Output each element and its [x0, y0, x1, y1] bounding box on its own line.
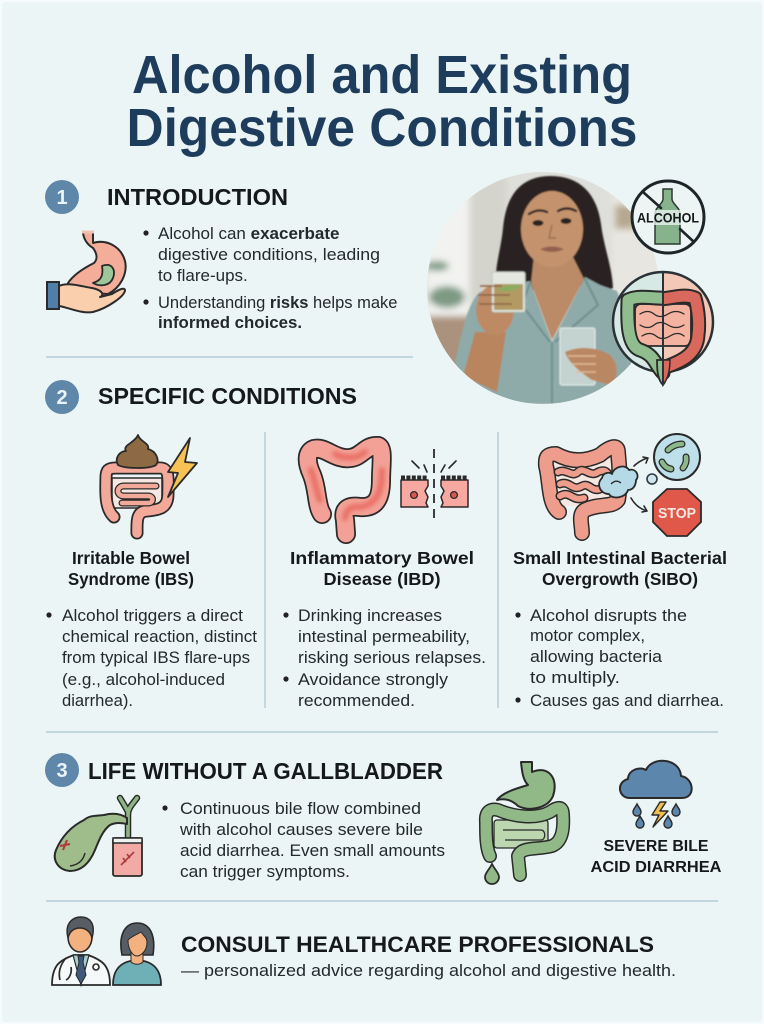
glass with juice: [492, 272, 525, 312]
heading: introduction: INTRODUCTION: [107, 184, 288, 210]
section 3: life without a gallbladder: [45, 753, 722, 884]
number badge 2: 2: [56, 387, 68, 409]
icon: inflamed colon: [308, 446, 382, 534]
icon: intestine with bacteria and stop sign: STOP: [658, 505, 696, 522]
number badge 1: [45, 180, 79, 214]
neck and chest: [531, 255, 584, 340]
label: severe bile acid diarrhea: ACID DIARRHEA: [590, 859, 722, 876]
heading: life without a gallbladder: LIFE WITHOUT A GALLBLADDER: [88, 758, 443, 784]
text block: introduction bullets: Alcohol can exacerbate: [158, 224, 339, 243]
photo: woman holding drinks: [425, 172, 662, 404]
text block: gallbladder bullet: with alcohol causes severe bile: [179, 820, 423, 839]
heading: SIBO: Overgrowth (SIBO): [542, 569, 698, 589]
text block: IBS bullets: Alcohol triggers a direct: [62, 606, 243, 625]
text block: introduction bullets: informed choices.: [158, 313, 302, 332]
heading: IBD: Inflammatory Bowel: [290, 548, 474, 568]
hair: [496, 176, 613, 292]
text block: gallbladder bullet: Continuous bile flow combined: [180, 799, 421, 818]
label: severe bile acid diarrhea: SEVERE BILE: [604, 838, 708, 855]
icon: no alcohol sign: ALCOHOL: [637, 210, 699, 226]
text block: gallbladder bullet: acid diarrhea. Even small amounts: [180, 841, 445, 860]
text block: introduction bullets: to flare-ups.: [158, 266, 248, 285]
icon: IBS intestine with lightning: [106, 435, 197, 533]
number badge 3: 3: [56, 760, 68, 782]
text block: SIBO bullets: [515, 606, 724, 710]
text block: IBD bullets: intestinal permeability,: [298, 627, 470, 646]
text block: gallbladder bullet: [162, 799, 445, 881]
icon: stomach in hand: [47, 232, 126, 312]
section: consult healthcare professionals: [52, 917, 676, 985]
icon: green digestive tract: [485, 762, 563, 884]
heading: IBS: Syndrome (IBS): [68, 569, 194, 589]
shirt: [455, 277, 632, 404]
number badge 3: [45, 753, 79, 787]
text block: SIBO bullets: allowing bacteria: [530, 647, 663, 666]
heading: SIBO: Small Intestinal Bacterial: [513, 548, 727, 568]
divider: [46, 900, 718, 902]
divider: [46, 731, 718, 733]
icon: doctor and patient: [52, 917, 161, 985]
panel: IBD: [283, 446, 486, 710]
section 2: specific conditions: [45, 380, 357, 414]
text block: IBS bullets: [46, 606, 257, 710]
water glass and hand: [560, 328, 595, 385]
text block: IBD bullets: risking serious relapses.: [298, 648, 486, 667]
text block: IBS bullets: (e.g., alcohol-induced: [62, 670, 225, 689]
number badge 1: 1: [56, 187, 68, 209]
divider: [46, 356, 413, 358]
icon: no alcohol sign: [632, 181, 704, 253]
title: Digestive Conditions: [126, 98, 638, 158]
text block: SIBO bullets: to multiply.: [530, 668, 620, 687]
text block: introduction bullets: [143, 224, 397, 332]
icon: intestine with bacteria and stop sign: [546, 434, 701, 536]
icon: storm cloud: [620, 761, 692, 828]
text block: IBD bullets: Drinking increases: [298, 606, 442, 625]
colon halves: [628, 297, 680, 373]
text block: IBD bullets: Avoidance strongly: [298, 670, 449, 689]
text block: IBD bullets: recommended.: [298, 691, 415, 710]
left arm: [463, 332, 506, 392]
small intestine: [635, 304, 691, 346]
panel: SIBO: [513, 434, 727, 710]
panel: IBS: [46, 435, 257, 710]
heading: IBD: [290, 548, 474, 589]
text block: introduction bullets: Understanding risks helps make: [158, 294, 397, 312]
text block: SIBO bullets: Alcohol disrupts the: [530, 606, 687, 625]
divider: [265, 432, 498, 708]
text block: gallbladder bullet: can trigger symptoms.: [180, 862, 350, 881]
heading: IBS: Irritable Bowel: [72, 548, 190, 568]
heading: IBS: [68, 548, 194, 589]
text block: SIBO bullets: Causes gas and diarrhea.: [530, 691, 724, 710]
text block: IBS bullets: diarrhea).: [62, 691, 133, 710]
heading: IBD: Disease (IBD): [324, 569, 440, 589]
text block: IBD bullets: [283, 606, 486, 710]
text block: IBS bullets: from typical IBS flare-ups: [62, 648, 250, 667]
text block: personalized advice: — personalized advice regarding alcohol and digestive health.: [181, 961, 676, 980]
heading: specific conditions: SPECIFIC CONDITIONS: [98, 383, 357, 409]
title: Alcohol and Existing: [132, 45, 632, 105]
text block: IBS bullets: chemical reaction, distinct: [62, 627, 257, 646]
text block: SIBO bullets: motor complex,: [530, 626, 645, 645]
heading: SIBO: [513, 548, 727, 589]
icon: gallbladder and pouch: [55, 798, 142, 876]
title: [126, 45, 638, 158]
label: severe bile acid diarrhea: [590, 838, 722, 876]
text block: introduction bullets: digestive conditions, leading: [158, 245, 380, 264]
heading: consult healthcare professionals: CONSULT HEALTHCARE PROFESSIONALS: [181, 932, 654, 957]
number badge 2: [45, 380, 79, 414]
face: [521, 191, 583, 267]
section 1: introduction: [45, 180, 397, 332]
icon: healthy versus inflamed colon: [613, 272, 713, 385]
icon: leaky intestinal wall: [401, 449, 468, 523]
